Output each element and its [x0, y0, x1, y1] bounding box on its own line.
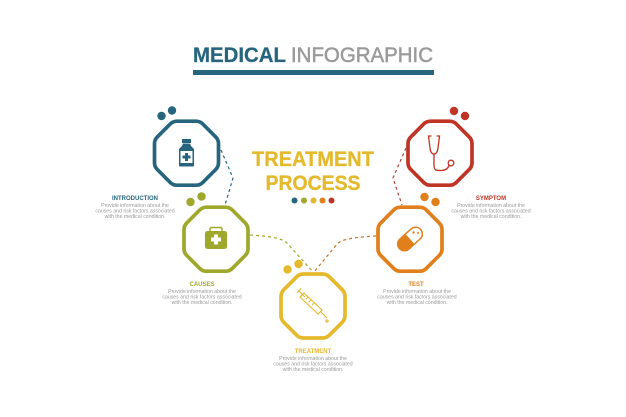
- colour dots: [292, 198, 334, 204]
- octagon: introduction: [154, 121, 218, 185]
- label: test: [377, 282, 457, 306]
- title: [193, 43, 434, 75]
- label: symptom: SYMPTOM: [476, 196, 506, 202]
- label: causes: CAUSES: [189, 282, 215, 288]
- label: treatment: causes and risk factors associated: [273, 362, 353, 368]
- label: symptom: causes and risk factors associated: [451, 208, 531, 214]
- dots: test: [420, 193, 440, 206]
- label: treatment: with the medical condition.: [283, 367, 343, 373]
- label: causes: Provide information about the: [168, 289, 236, 295]
- label: treatment: TREATMENT: [295, 349, 332, 355]
- octagon: treatment: [281, 274, 345, 338]
- icon: syringe: [297, 288, 328, 322]
- panel: test: [377, 193, 457, 306]
- label: test: Provide information about the: [383, 289, 451, 295]
- label: treatment: Provide information about the: [279, 356, 347, 362]
- label: causes: with the medical condition.: [172, 300, 232, 306]
- dashed connector: causes to treatment: [250, 235, 313, 272]
- octagon: test: [378, 207, 442, 271]
- icon: first aid kit: [205, 228, 227, 249]
- icon: stethoscope: [428, 136, 454, 171]
- label: causes: [162, 282, 242, 306]
- dots: introduction: [157, 106, 176, 120]
- label: test: TEST: [408, 282, 424, 288]
- title: INFOGRAPHIC: [291, 43, 433, 67]
- label: symptom: Provide information about the: [457, 203, 525, 209]
- panel: causes: [162, 192, 248, 306]
- dots: treatment: [283, 260, 303, 274]
- label: introduction: INTRODUCTION: [112, 196, 158, 202]
- icon: capsule: [394, 223, 426, 255]
- panel: treatment: [273, 260, 353, 373]
- heading: treatment process: PROCESS: [266, 172, 360, 195]
- dashed connector: symptom to test: [393, 148, 406, 205]
- heading: treatment process: TREATMENT: [252, 148, 374, 171]
- dots: causes: [186, 192, 206, 206]
- dashed connector: test to treatment: [314, 236, 376, 272]
- panel: introduction: [95, 106, 218, 220]
- title: MEDICAL: [193, 43, 286, 67]
- label: symptom: [451, 196, 531, 220]
- label: introduction: with the medical condition.: [105, 214, 165, 220]
- label: causes: causes and risk factors associated: [162, 294, 242, 300]
- octagon: symptom: [408, 121, 472, 185]
- label: treatment: [273, 349, 353, 373]
- label: introduction: Provide information about the: [101, 203, 169, 209]
- label: test: with the medical condition.: [387, 300, 447, 306]
- label: introduction: [95, 196, 175, 220]
- dashed connector: introduction to causes: [221, 150, 233, 205]
- octagon: causes: [184, 207, 248, 271]
- label: symptom: with the medical condition.: [461, 214, 521, 220]
- icon: medicine bottle: [179, 139, 194, 166]
- label: introduction: causes and risk factors associated: [95, 208, 175, 214]
- heading: treatment process: [252, 148, 374, 195]
- dots: symptom: [450, 107, 469, 120]
- panel: symptom: [408, 107, 531, 220]
- label: test: causes and risk factors associated: [377, 294, 457, 300]
